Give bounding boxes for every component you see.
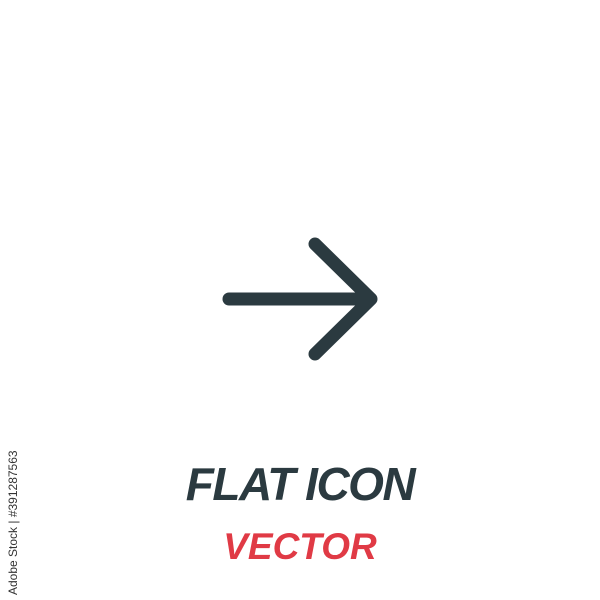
subtitle: VECTOR: VECTOR	[223, 526, 377, 567]
title: FLAT ICON: FLAT ICON	[186, 458, 414, 510]
side text: stock id: Adobe Stock | #391287563	[6, 450, 20, 595]
